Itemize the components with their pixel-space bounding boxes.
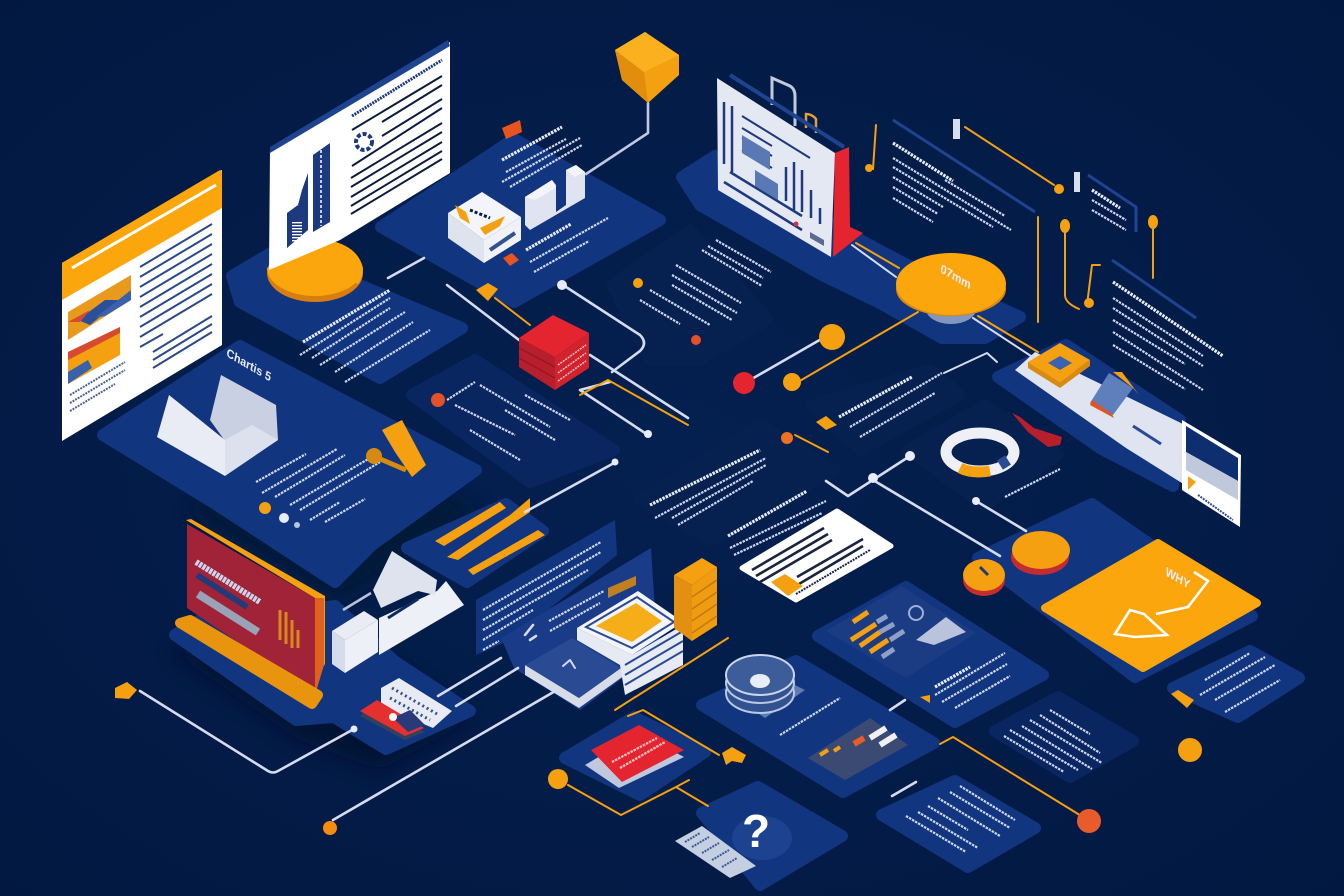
icon: red stack <box>519 315 589 390</box>
text lines <box>352 60 442 116</box>
grey tile <box>916 617 966 645</box>
panel text: left large <box>256 449 380 522</box>
orange triangle <box>920 695 930 703</box>
icon: red dot <box>431 393 445 407</box>
grey bars <box>877 616 904 657</box>
question mark icon <box>732 805 792 860</box>
connector: elbow <box>781 353 997 452</box>
icon: shield <box>615 32 679 103</box>
icon: orange stack <box>674 558 717 641</box>
panel: orange bars <box>407 498 545 582</box>
right text panel G <box>865 120 1038 322</box>
orange connectors right <box>953 119 1158 309</box>
connector: central long <box>525 458 618 512</box>
icon: orange dial <box>963 559 1005 596</box>
panel: central left text <box>640 425 835 540</box>
icon: orange box <box>1028 343 1090 388</box>
icon: monitor with chart <box>717 75 863 257</box>
connectors: left-bottom <box>115 682 358 772</box>
caption <box>728 491 807 536</box>
icon: chair device <box>1090 372 1169 448</box>
document: navy chart <box>269 40 450 270</box>
striped tag <box>608 576 636 598</box>
panel: chart card <box>818 586 1043 722</box>
document: orange header <box>62 170 222 441</box>
disc icon <box>724 655 805 718</box>
panel: question <box>675 787 842 885</box>
cube top <box>332 611 378 640</box>
colourful image 2 <box>68 327 120 384</box>
connectors: gadget links <box>438 658 518 706</box>
panel: ring dark <box>908 405 1058 505</box>
slot <box>388 599 418 618</box>
icon: cube <box>448 192 521 263</box>
connectors: right centre <box>826 451 1026 556</box>
orange tag <box>1171 690 1194 708</box>
panel: red book base <box>565 717 705 795</box>
white info card <box>1182 420 1241 527</box>
body lines <box>140 224 212 368</box>
connector: short marks <box>890 700 916 796</box>
panel: text slab front <box>501 548 660 710</box>
connectors: disc links <box>798 243 1038 382</box>
cube right <box>345 620 378 673</box>
inner panel <box>826 586 976 678</box>
icon: ring <box>946 433 1060 497</box>
icon: small bullets <box>259 502 300 528</box>
panel: text slab back <box>476 520 617 655</box>
connector: red + orange pins <box>733 324 845 394</box>
gear icon <box>909 606 923 620</box>
icon: red and white gadgets <box>360 678 452 740</box>
icon: red wing <box>1012 413 1062 447</box>
panel: red monitor base <box>170 606 470 770</box>
orange tag <box>115 682 137 699</box>
colourful image 1 <box>68 275 131 340</box>
paper <box>675 826 756 878</box>
chart column <box>313 143 330 232</box>
panel: device tray <box>998 345 1185 486</box>
panel: left large <box>103 345 480 600</box>
question mark icon: ? <box>742 805 770 857</box>
panel: monitor base <box>682 156 1020 338</box>
screen lines <box>724 102 802 230</box>
panel: bottom right large <box>978 504 1257 677</box>
orange plate <box>1045 543 1257 668</box>
disc label: 07mm <box>939 261 972 292</box>
connector: orange to red pin <box>940 737 1101 833</box>
label: route: WHY <box>1164 564 1191 592</box>
panel: disc card <box>702 655 934 792</box>
red book <box>585 733 684 788</box>
panel text: top centre heading <box>502 127 562 160</box>
orange tag on panel B <box>502 120 522 139</box>
icon: white blocks <box>332 551 464 673</box>
icon: orange button disc <box>896 253 1006 324</box>
gear <box>356 134 372 150</box>
connector: orange book loops <box>548 638 746 815</box>
icon: route diagram <box>1115 572 1208 637</box>
panel: centre text <box>612 230 771 360</box>
dashed diagram <box>447 382 570 460</box>
icon: folded paper <box>157 375 278 476</box>
panel: red stack text area <box>412 360 614 482</box>
top piece <box>373 551 437 608</box>
panel text: document base <box>303 290 390 342</box>
shield connector <box>586 103 648 174</box>
panel: dark text <box>995 697 1133 777</box>
right text panel H <box>1088 175 1136 232</box>
text lines <box>640 240 771 325</box>
connectors: red stack <box>388 258 688 438</box>
header band <box>62 170 222 300</box>
cube left <box>332 631 345 673</box>
panel: bottom text <box>882 781 1035 867</box>
icon: book stack <box>577 591 683 695</box>
chart device <box>287 173 308 248</box>
mini chart <box>808 718 908 780</box>
icon: red billboard <box>186 519 325 695</box>
connector marks <box>525 625 536 640</box>
right text panel I <box>1112 260 1223 390</box>
small red marker <box>503 253 519 266</box>
orange bars <box>851 612 888 652</box>
panel: right small <box>1171 651 1299 717</box>
icon: white bars <box>525 165 585 230</box>
orange dot <box>1178 738 1202 762</box>
long box <box>379 581 464 655</box>
bars <box>435 502 506 546</box>
text <box>935 653 1010 708</box>
monitor handle <box>772 78 795 126</box>
icon: orange pill <box>1011 531 1070 575</box>
bullets <box>633 278 701 345</box>
tray surface <box>1015 352 1185 485</box>
icon: orange base bar <box>180 620 318 704</box>
connector: diagonal to orange pin <box>323 690 557 835</box>
icon: orange hammer <box>366 420 426 477</box>
central left text <box>650 450 766 525</box>
panel heading: Charts: Chartis 5 <box>225 345 273 385</box>
panel: document base <box>232 250 462 382</box>
icon: blue book <box>525 638 625 708</box>
small caption <box>70 362 125 411</box>
rod <box>343 593 371 610</box>
panel: central right text <box>812 370 960 450</box>
orange disc <box>267 240 363 302</box>
panel: top centre <box>381 127 660 302</box>
paper card <box>728 491 891 600</box>
